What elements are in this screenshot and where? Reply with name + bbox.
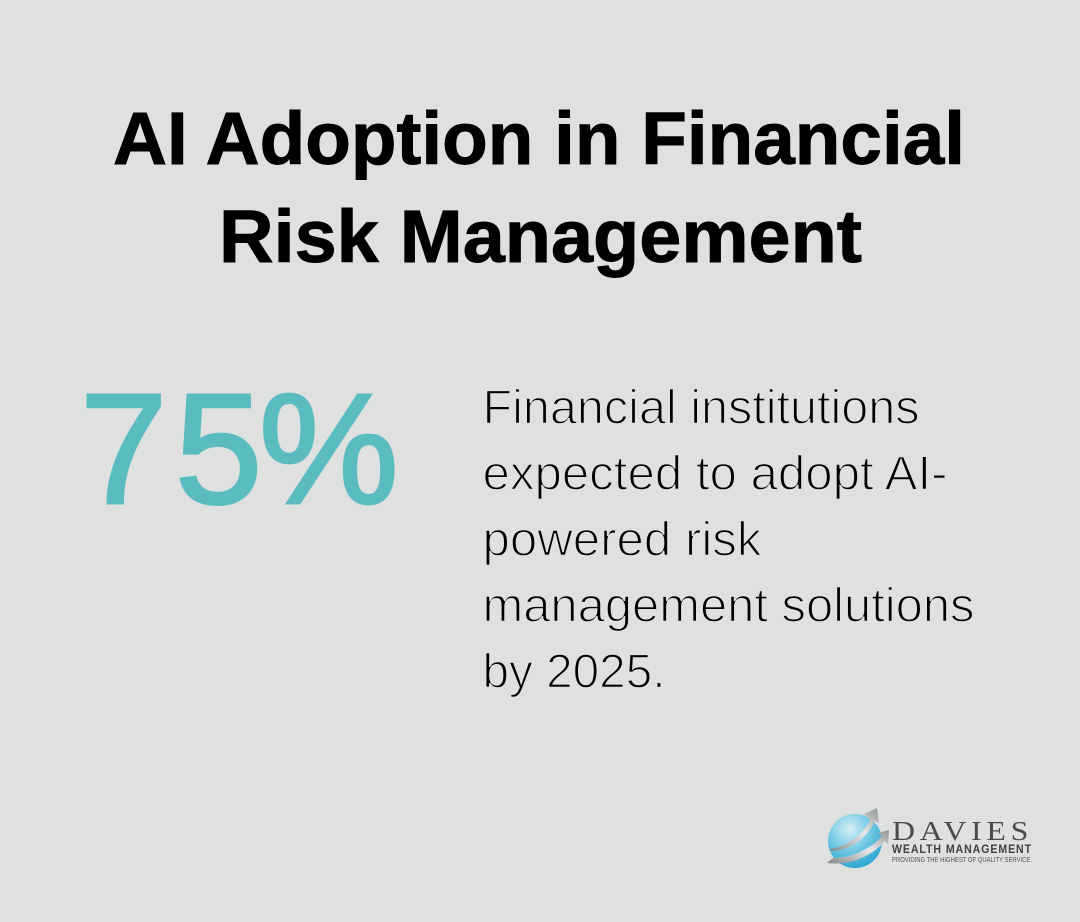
description text — [482, 380, 974, 698]
statistic: 75%: 75% — [80, 362, 399, 537]
description text: expected to adopt AI- — [482, 446, 948, 500]
logo subtitle: WEALTH MANAGEMENT — [892, 844, 1032, 856]
title — [113, 97, 965, 278]
logo tagline: PROVIDING THE HIGHEST OF QUALITY SERVICE. — [892, 857, 1032, 864]
title: AI Adoption in Financial — [113, 97, 965, 180]
logo: Davies Wealth Management — [827, 808, 1033, 868]
logo wordmark: DAVIES — [892, 816, 1033, 846]
description text: powered risk — [482, 512, 762, 566]
description text: Financial institutions — [482, 380, 920, 434]
description text: by 2025. — [482, 644, 666, 698]
title: Risk Management — [219, 195, 862, 278]
icon: globe with arrows — [827, 808, 889, 868]
description text: management solutions — [482, 578, 974, 632]
